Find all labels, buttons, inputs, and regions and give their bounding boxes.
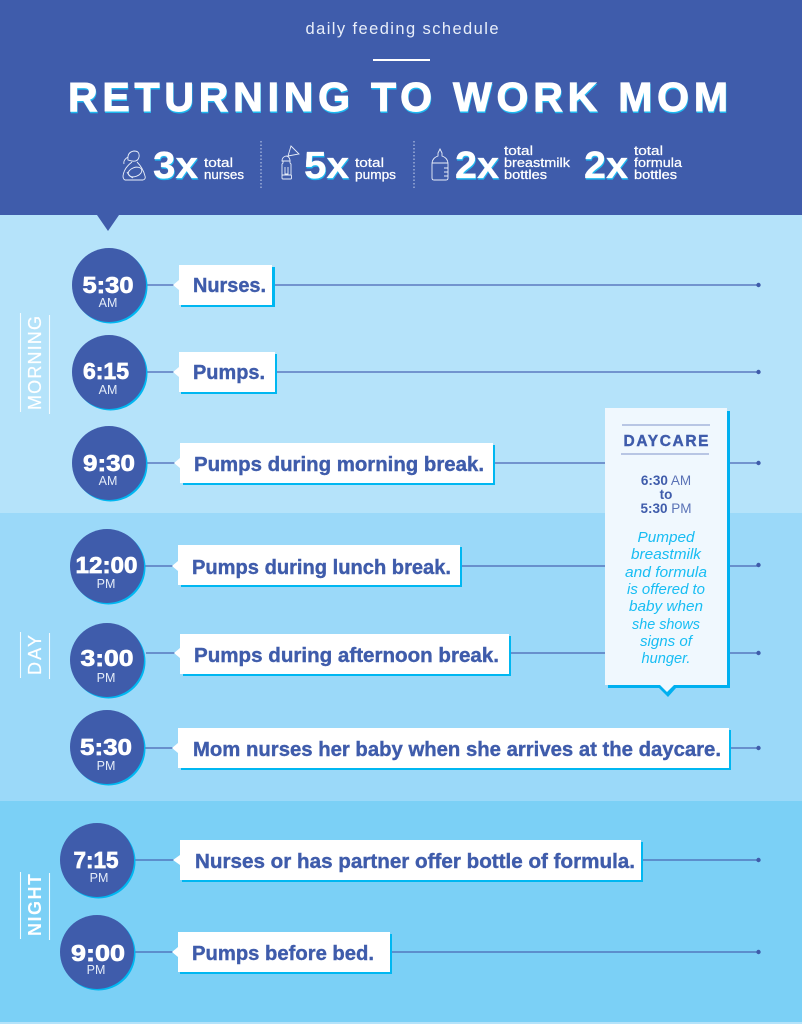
label: day	[20, 632, 50, 679]
row: 7:15 PM formula: Nurses or has partner offer bottle of formula.	[195, 850, 635, 873]
label: morning	[20, 313, 50, 414]
row: 5:30 AM nurses: 5:30	[82, 272, 134, 298]
callout description: signs of	[640, 633, 694, 650]
title: RETURNING TO WORK MOM	[68, 76, 728, 122]
row: 3:00 PM afternoon break: PM	[97, 671, 115, 685]
stat: 2x total breastmilk bottles: breastmilk	[504, 155, 571, 170]
title: RETURNING TO WORK MOM	[68, 74, 728, 120]
row: 5:30 PM daycare pickup: 5:30	[80, 734, 132, 760]
callout hours: to	[660, 487, 672, 502]
row: 7:15 PM formula: PM	[90, 871, 108, 885]
callout description: Pumped	[638, 529, 695, 546]
callout description: she shows	[632, 616, 700, 633]
stat: 3x total nurses: total	[204, 155, 233, 170]
row: 3:00 PM afternoon break: Pumps during afternoon break.	[194, 644, 499, 667]
row: 12:00 PM lunch break: Pumps during lunch break.	[192, 556, 451, 579]
callout heading: DAYCARE	[624, 433, 708, 450]
icon: breast pump	[282, 146, 299, 179]
icon: mother holding baby	[123, 151, 145, 180]
row: 7:15 PM formula	[60, 823, 761, 898]
row: 9:00 PM before bed: PM	[87, 963, 105, 977]
row: 9:00 PM before bed: Pumps before bed.	[192, 942, 374, 965]
row: 9:30 AM morning break: 9:30	[83, 450, 135, 476]
label: day: DAY	[25, 635, 45, 675]
band: night	[0, 801, 802, 1022]
stat: 5x total pumps: pumps	[355, 167, 397, 182]
stat: 2x total formula bottles	[584, 143, 683, 188]
stat: 2x total formula bottles: 2x	[585, 146, 629, 188]
band: morning	[0, 215, 802, 513]
icon: bottle	[432, 149, 448, 180]
row: 3:00 PM afternoon break	[70, 623, 761, 698]
band: day	[0, 513, 802, 801]
row: 9:00 PM before bed: 9:00	[71, 940, 125, 966]
callout description: hunger.	[642, 650, 690, 667]
row: 5:30 AM nurses: Nurses.	[193, 274, 266, 297]
row: 7:15 PM formula: 7:15	[74, 847, 119, 873]
row: 5:30 PM daycare pickup: Mom nurses her baby when she arrives at the daycare.	[193, 738, 721, 761]
row: 9:00 PM before bed	[60, 915, 761, 990]
row: 5:30 PM daycare pickup	[70, 710, 761, 786]
row: 3:00 PM afternoon break: 3:00	[80, 645, 134, 671]
callout hours	[640, 473, 692, 516]
row: 9:30 AM morning break: Pumps during morning break.	[194, 453, 484, 476]
callout description: is offered to	[627, 581, 705, 598]
stat: 5x total pumps	[282, 145, 397, 188]
stat: 2x total breastmilk bottles: 2x	[455, 145, 499, 187]
callout hours: 6:30 AM	[641, 473, 691, 488]
stat: 3x total nurses	[123, 145, 244, 188]
stat: 5x total pumps: 5x	[304, 145, 349, 187]
stat: 2x total breastmilk bottles: bottles	[504, 167, 548, 182]
callout hours: 5:30 PM	[640, 501, 692, 516]
callout: daycare	[605, 408, 730, 697]
row: 5:30 AM nurses	[72, 248, 761, 324]
row: 5:30 AM nurses: AM	[99, 296, 117, 310]
label: morning: MORNING	[25, 316, 45, 410]
row: 9:30 AM morning break	[72, 426, 761, 502]
stat: 3x total nurses: 3x	[154, 146, 199, 188]
stat: 2x total breastmilk bottles: 2x	[456, 146, 500, 188]
callout description	[625, 529, 707, 667]
row: 6:15 AM pumps: Pumps.	[193, 361, 265, 384]
callout description: baby when	[629, 598, 703, 615]
label: night	[20, 872, 50, 940]
header	[0, 0, 802, 231]
stat: 5x total pumps: 5x	[305, 146, 350, 188]
row: 6:15 AM pumps	[72, 335, 761, 410]
stat: 2x total formula bottles: bottles	[634, 167, 678, 182]
stat: 3x total nurses: nurses	[204, 167, 244, 182]
row: 12:00 PM lunch break: PM	[97, 577, 115, 591]
row: 6:15 AM pumps: 6:15	[83, 358, 129, 384]
subtitle: daily feeding schedule	[306, 20, 498, 38]
callout description: breastmilk	[631, 546, 703, 563]
stat: 2x total formula bottles: 2x	[584, 145, 628, 187]
row: 6:15 AM pumps: AM	[99, 383, 117, 397]
row: 5:30 PM daycare pickup: PM	[97, 759, 115, 773]
stat: 3x total nurses: 3x	[153, 145, 198, 187]
label: night: NIGHT	[25, 874, 45, 936]
stat: 5x total pumps: total	[355, 155, 384, 170]
stat: 2x total formula bottles: formula	[634, 155, 683, 170]
stat: 2x total formula bottles: total	[634, 143, 663, 158]
row: 12:00 PM lunch break	[70, 529, 761, 604]
callout description: and formula	[625, 564, 707, 581]
row: 12:00 PM lunch break: 12:00	[76, 552, 138, 578]
stat: 2x total breastmilk bottles	[432, 143, 571, 188]
row: 9:30 AM morning break: AM	[99, 474, 117, 488]
stat: 2x total breastmilk bottles: total	[504, 143, 533, 158]
